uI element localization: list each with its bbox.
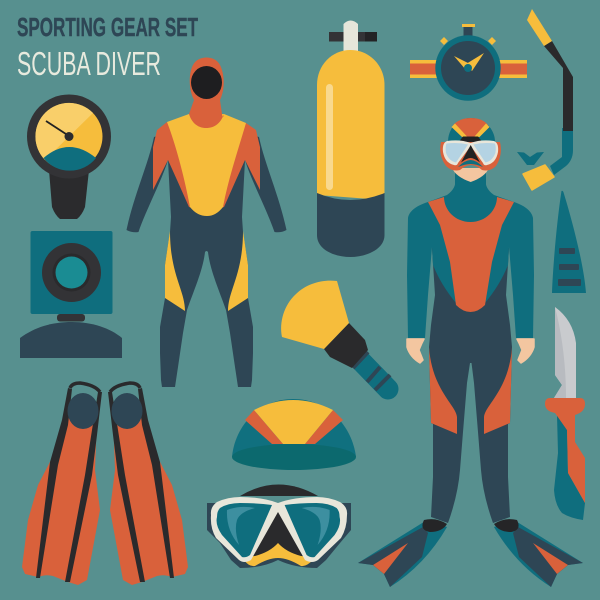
mask lenses (446, 143, 496, 162)
boots (422, 519, 519, 532)
title block (17, 12, 198, 83)
icon: air tank (317, 20, 384, 257)
face opening (191, 66, 222, 99)
chin (452, 168, 489, 182)
hands (407, 339, 534, 363)
orange leg panels (429, 347, 512, 434)
icon: underwater camera (20, 231, 122, 358)
left fin (22, 383, 102, 585)
icon: dive mask (207, 484, 351, 568)
suit body (126, 120, 286, 387)
mask frame (443, 140, 498, 165)
mask nose (461, 145, 480, 162)
icon: dive watch (410, 24, 527, 101)
wetsuit (126, 58, 286, 387)
yellow chest (167, 114, 246, 216)
hood orange top (453, 118, 488, 137)
hood yellow stripes (452, 124, 490, 137)
lens highlights (227, 507, 330, 545)
forehead (458, 136, 483, 143)
icon: snorkel (517, 9, 573, 190)
title block: SCUBA DIVER (17, 46, 161, 83)
mask lenses (217, 503, 340, 557)
yellow leg panels (165, 231, 248, 311)
right fin (108, 383, 188, 585)
scuba diver figure (358, 118, 583, 587)
icon: pressure gauge (27, 94, 111, 219)
icon: dive knife (545, 307, 585, 520)
teal torso and arms (407, 175, 534, 338)
legs and torso (429, 248, 512, 523)
mask strap and backing (207, 503, 351, 568)
icon: fins pair (22, 383, 188, 585)
mask yellow trim (244, 543, 313, 566)
icon: swim cap (232, 399, 356, 470)
neck (455, 172, 486, 190)
mask frame (211, 497, 347, 562)
orange shoulders (153, 115, 260, 212)
mask top (240, 484, 318, 496)
title block: SPORTING GEAR SET (17, 12, 198, 42)
orange chest panel (428, 197, 514, 312)
icon: flashlight (281, 281, 390, 390)
orange hood (189, 58, 224, 128)
hood dome (448, 118, 495, 142)
mask back (440, 142, 501, 170)
icon: dive sheath (552, 191, 586, 293)
mask nose (251, 505, 305, 558)
fins (358, 520, 583, 587)
head with hood (440, 118, 501, 190)
